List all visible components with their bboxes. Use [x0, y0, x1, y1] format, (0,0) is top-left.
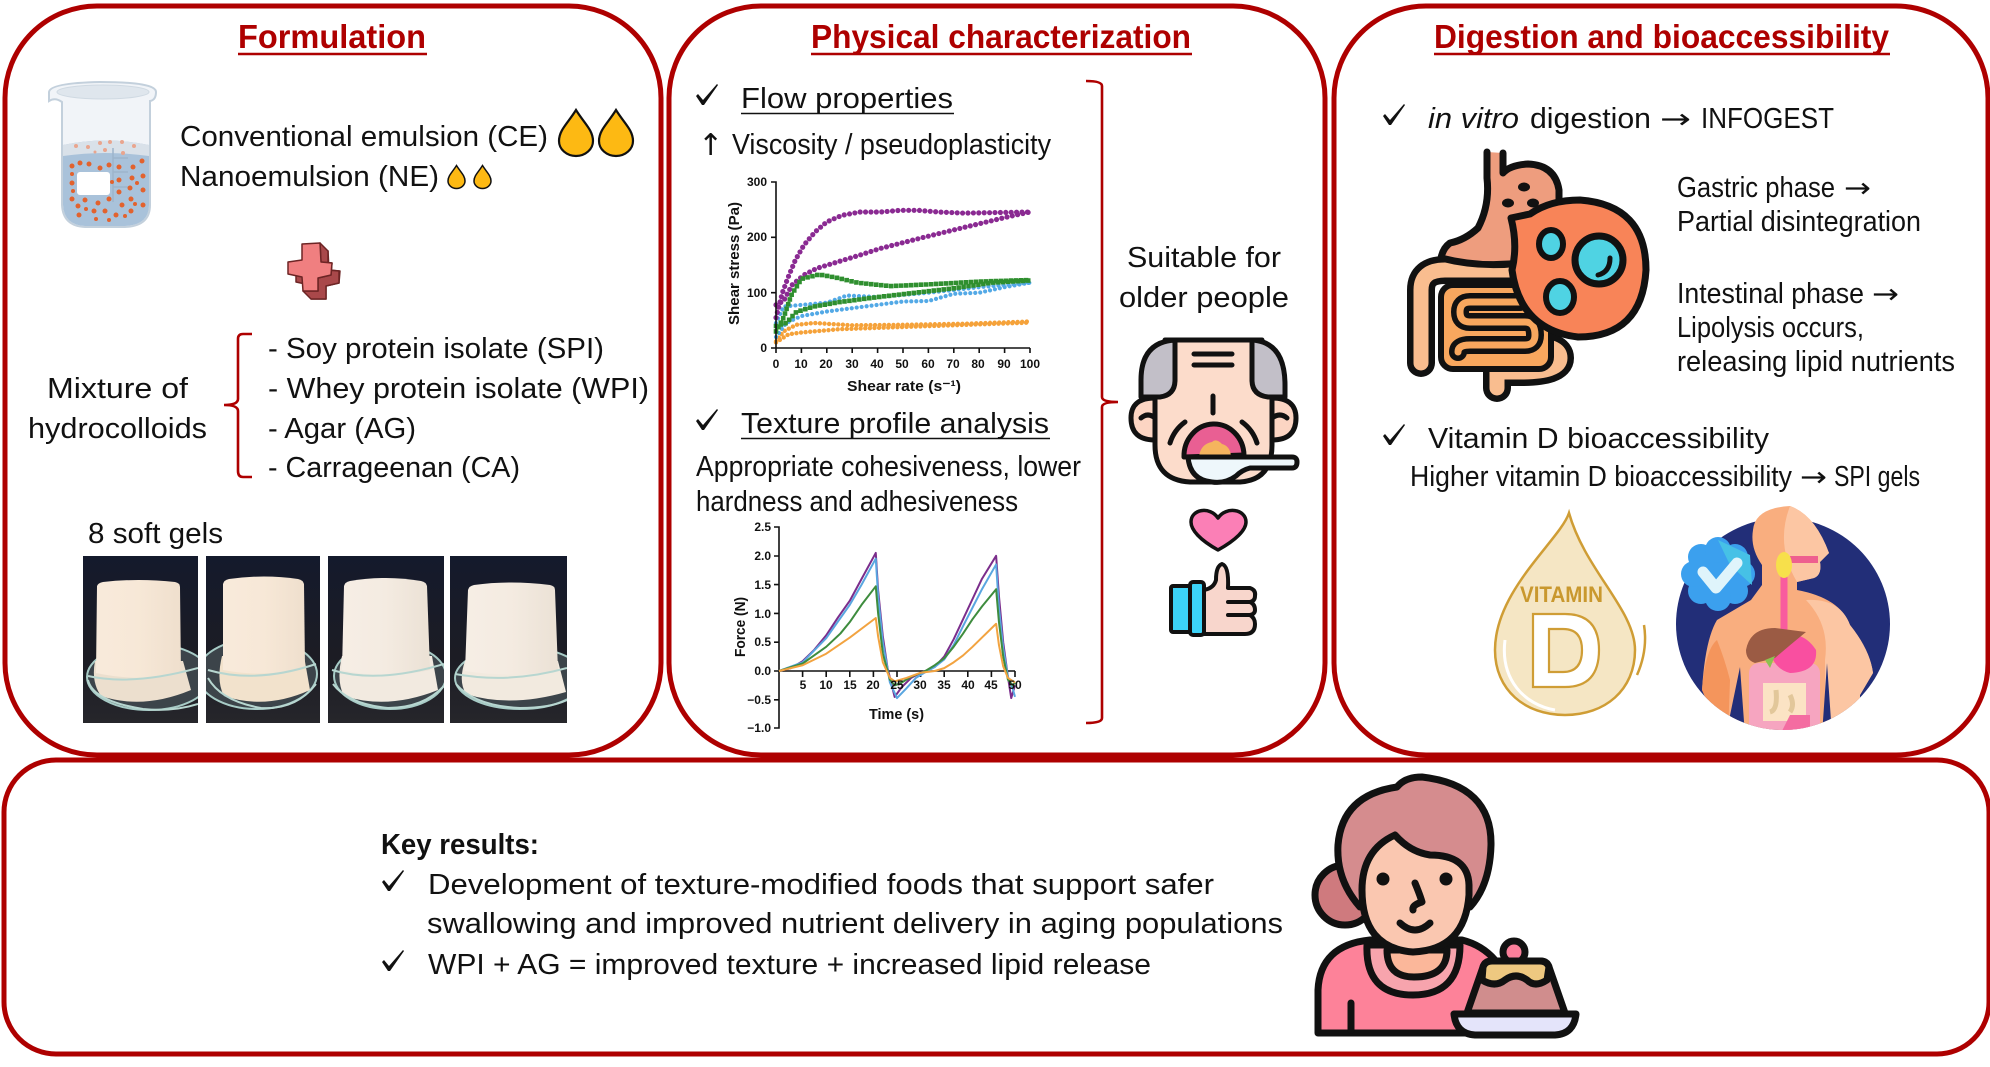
chart: force vs time: 15	[843, 678, 857, 692]
text: suitable for older people: Suitable for	[1127, 242, 1281, 274]
icon: check flow properties	[696, 84, 718, 105]
chart: shear stress vs shear rate: 40	[870, 357, 884, 371]
icon: beaker with emulsion	[49, 82, 156, 227]
chart: shear stress vs shear rate: 0	[773, 357, 780, 371]
text: nanoemulsion: Nanoemulsion (NE)	[180, 161, 439, 193]
icon: older man eating	[1131, 340, 1297, 482]
text: mixture of hydrocolloids: hydrocolloids	[28, 413, 207, 445]
chart: force vs time: 30	[913, 678, 927, 692]
text: suitable for older people: older people	[1119, 282, 1289, 314]
heading: key results: Key results:	[381, 829, 539, 861]
chart: force vs time: Time (s)	[869, 706, 924, 723]
icon: check result one	[382, 870, 404, 891]
icon: woman with dessert	[1315, 777, 1576, 1035]
chart: shear stress vs shear rate: 100	[1020, 357, 1040, 371]
icon: large oil drops	[559, 110, 633, 156]
chart: force vs time: −1.0	[747, 721, 771, 735]
icon: check in vitro	[1383, 104, 1405, 125]
series: orange	[776, 322, 1030, 342]
bracket: hydrocolloids	[224, 334, 252, 477]
text: in vitro digestion	[1428, 103, 1834, 135]
text: gastric phase: Partial disintegration	[1677, 206, 1921, 238]
series: purple	[776, 210, 1030, 318]
curve: green	[779, 586, 1015, 685]
chart: force vs time: 20	[866, 678, 880, 692]
chart: force vs time: 40	[961, 678, 975, 692]
text: intestinal phase	[1677, 278, 1955, 378]
icon: check texture profile	[696, 409, 718, 430]
chart: shear stress vs shear rate: 50	[895, 357, 909, 371]
list: hydrocolloid ingredients: - Agar (AG)	[268, 413, 416, 445]
text: higher vitamin D: Higher vitamin D bioaccessibility	[1410, 461, 1792, 493]
text: gastric phase: →	[1844, 173, 1871, 204]
chart: shear stress vs shear rate: 90	[997, 357, 1011, 371]
chart: force vs time	[732, 520, 1022, 735]
chart: shear stress vs shear rate: 0	[760, 341, 767, 355]
text: texture description	[696, 451, 1081, 518]
list: hydrocolloid ingredients: - Soy protein isolate (SPI)	[268, 333, 604, 365]
icon: plus sign	[288, 243, 340, 299]
text: vitamin D bioaccessibility: Vitamin D bioaccessibility	[1428, 423, 1770, 455]
text: in vitro digestion: INFOGEST	[1701, 103, 1834, 135]
heading: digestion and bioaccessibility: Digestion and bioaccessibility	[1434, 18, 1890, 55]
photo: gel 1	[83, 556, 198, 723]
chart: shear stress vs shear rate: 30	[845, 357, 859, 371]
subheading: flow properties: Flow properties	[741, 83, 953, 115]
chart: force vs time: 35	[937, 678, 951, 692]
chart: shear stress vs shear rate: 200	[747, 230, 767, 244]
photo: gel 3	[328, 556, 444, 723]
icon: vitamin D drop: VITAMIN	[1520, 582, 1603, 607]
chart: shear stress vs shear rate: 80	[971, 357, 985, 371]
list: hydrocolloid ingredients	[268, 333, 649, 484]
list: hydrocolloid ingredients: - Whey protein isolate (WPI)	[268, 373, 649, 405]
chart: shear stress vs shear rate: Shear rate (s⁻¹)	[847, 378, 961, 395]
series: blue	[776, 283, 1030, 337]
photo: gel 4	[450, 556, 567, 723]
chart: force vs time: 0.5	[754, 635, 771, 649]
text: viscosity: ↑	[698, 128, 723, 163]
series: green	[776, 274, 1030, 331]
panel: digestion and bioaccessibility	[1334, 6, 1988, 755]
text: result one: swallowing and improved nutrient delivery in aging populations	[427, 908, 1283, 940]
text: gastric phase: Gastric phase	[1677, 172, 1835, 204]
icon: small oil drops	[448, 166, 491, 188]
text: result one	[427, 869, 1283, 940]
chart: force vs time: 0.0	[754, 664, 771, 678]
text: mixture of hydrocolloids: Mixture of	[47, 373, 189, 405]
text: intestinal phase: Lipolysis occurs,	[1677, 312, 1864, 344]
text: in vitro digestion: in vitro	[1428, 103, 1519, 135]
curve: blue	[779, 559, 1015, 698]
chart: force vs time: 10	[819, 678, 833, 692]
heading: physical characterization: Physical characterization	[811, 18, 1191, 55]
chart: force vs time: 2.0	[754, 549, 771, 563]
icon: digestive system	[1421, 152, 1646, 388]
chart: force vs time: Force (N)	[732, 597, 749, 657]
icon: heart	[1191, 510, 1246, 550]
photo strip: soft gels	[83, 556, 585, 723]
panel: physical characterization	[669, 6, 1325, 755]
curve: purple	[779, 553, 1015, 698]
text: intestinal phase: →	[1872, 279, 1899, 310]
heading: formulation: Formulation	[238, 18, 426, 55]
chart: force vs time: 1.0	[754, 607, 771, 621]
chart: force vs time: −0.5	[747, 693, 771, 707]
chart: shear stress vs shear rate: 300	[747, 175, 767, 189]
chart: shear stress vs shear rate	[726, 175, 1040, 395]
text: intestinal phase: releasing lipid nutrients	[1677, 346, 1955, 378]
icon: human digestive tract	[1676, 506, 1890, 735]
bracket: suitability	[1086, 81, 1118, 723]
text: in vitro digestion: →	[1660, 104, 1691, 135]
chart: force vs time: 5	[800, 678, 807, 692]
text: viscosity: Viscosity / pseudoplasticity	[732, 129, 1051, 161]
icon: vitamin D drop	[1495, 513, 1645, 715]
text: texture description: Appropriate cohesiveness, lower	[696, 451, 1081, 483]
text: higher vitamin D: →	[1800, 462, 1827, 493]
chart: force vs time: 50	[1008, 678, 1022, 692]
icon: thumbs up	[1171, 564, 1255, 635]
text: result two: WPI + AG = improved texture + increased lipid release	[428, 949, 1151, 981]
text: intestinal phase: Intestinal phase	[1677, 278, 1864, 310]
chart: shear stress vs shear rate: 100	[747, 286, 767, 300]
chart: force vs time: 45	[984, 678, 998, 692]
chart: force vs time: 1.5	[754, 578, 771, 592]
text: gastric phase	[1677, 172, 1921, 238]
chart: shear stress vs shear rate: Shear stress (Pa)	[726, 202, 743, 325]
chart: force vs time: 2.5	[754, 520, 771, 534]
curve: orange	[779, 618, 1015, 683]
text: 8 soft gels: 8 soft gels	[88, 518, 223, 550]
icon: check result two	[382, 950, 404, 971]
list: hydrocolloid ingredients: - Carrageenan (CA)	[268, 452, 520, 484]
text: result one: Development of texture-modified foods that support safer	[428, 869, 1214, 901]
text: mixture of hydrocolloids	[28, 373, 207, 445]
text: higher vitamin D: SPI gels	[1834, 461, 1920, 493]
text: conventional emulsion: Conventional emulsion (CE)	[180, 121, 548, 153]
subheading: texture profile analysis: Texture profile analysis	[741, 408, 1049, 440]
panel: formulation	[5, 6, 661, 755]
chart: shear stress vs shear rate: 10	[794, 357, 808, 371]
icon: check vitamin D	[1383, 424, 1405, 445]
chart: force vs time: 25	[890, 678, 904, 692]
text: in vitro digestion: digestion	[1530, 103, 1651, 135]
panel: key results	[4, 760, 1989, 1054]
text: suitable for older people	[1119, 242, 1289, 314]
chart: shear stress vs shear rate: 70	[946, 357, 960, 371]
photo: gel 2	[206, 556, 320, 723]
text: texture description: hardness and adhesiveness	[696, 486, 1018, 518]
chart: shear stress vs shear rate: 60	[921, 357, 935, 371]
chart: shear stress vs shear rate: 20	[819, 357, 833, 371]
